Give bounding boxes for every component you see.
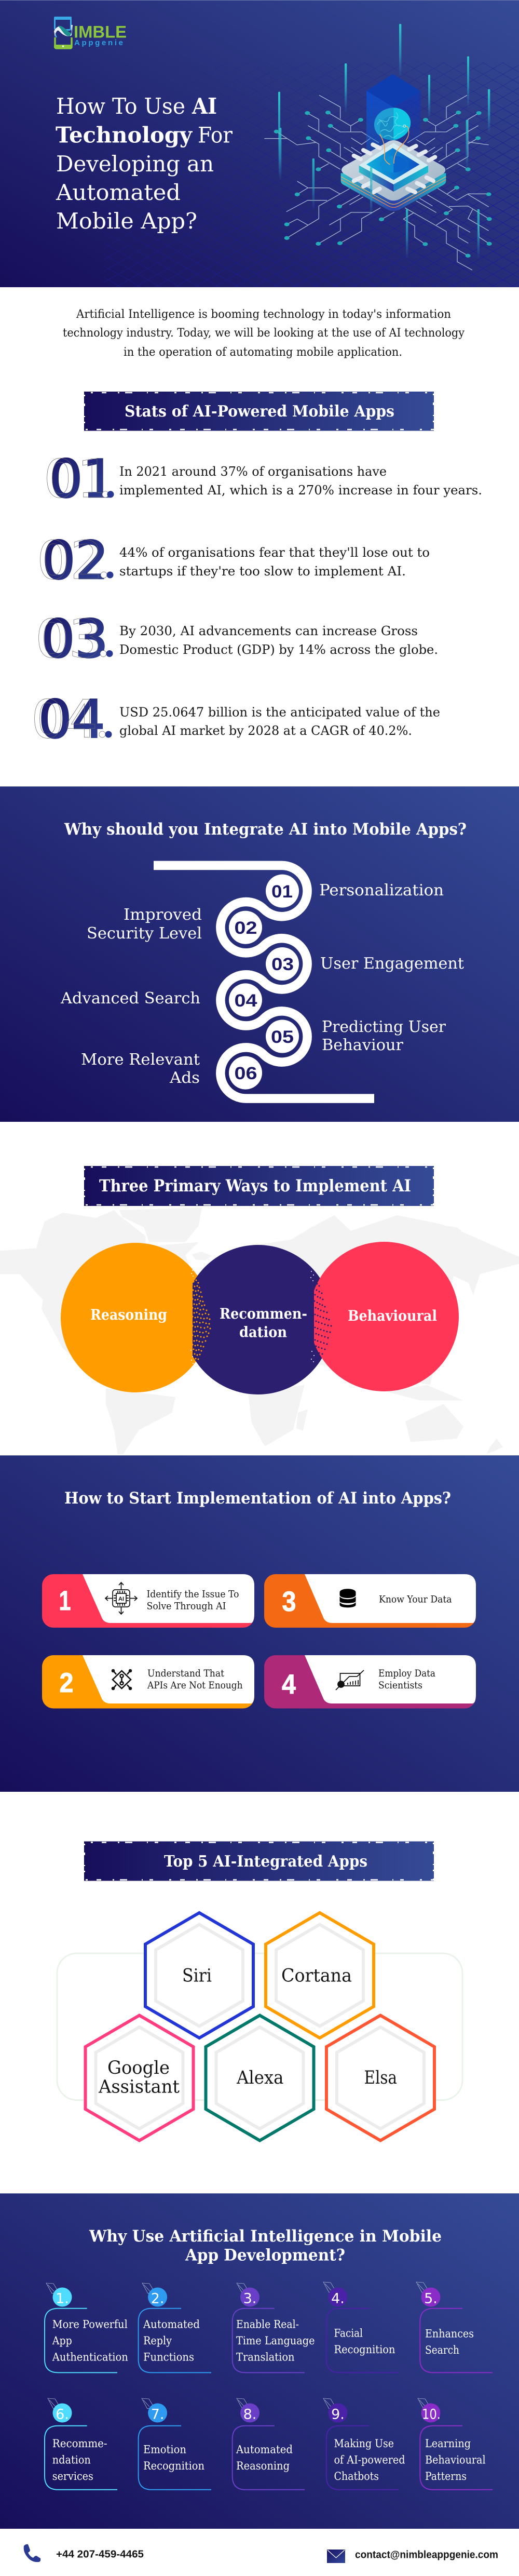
hexagon: Alexa: [206, 2015, 313, 2141]
reason 8: Automated: [236, 2443, 293, 2456]
hexagon: Alexa: Alexa: [236, 2068, 283, 2088]
title: AI: [192, 93, 217, 119]
stat 03: [35, 608, 438, 669]
card 1: 1: [59, 1586, 71, 1616]
card 1: Solve Through AI: [146, 1601, 226, 1612]
labels: Improved: [124, 906, 202, 924]
reason 1: 1.: [56, 2291, 69, 2307]
hexagon: Elsa: [326, 2015, 434, 2141]
number 04: 04: [38, 689, 105, 750]
reason 7: 7.: [151, 2407, 164, 2423]
stat 02: [37, 530, 430, 591]
labels: More Relevant: [81, 1051, 200, 1069]
labels: User Engagement: [320, 955, 464, 973]
card 4: Employ Data: [378, 1668, 435, 1679]
heading: stats banner: Stats of AI-Powered Mobile Apps: [125, 403, 394, 421]
circle labels: dation: [239, 1323, 287, 1341]
orange blend: [183, 1270, 211, 1364]
reason 1: [45, 2283, 128, 2372]
hexagon: Cortana: Cortana: [281, 1966, 352, 1987]
title: Automated: [56, 180, 181, 205]
stat 01: [44, 448, 482, 509]
heading: Why Use Artificial Intelligence in Mobile: [89, 2227, 442, 2246]
stat 04: [31, 689, 440, 750]
reason 6: 6.: [56, 2407, 69, 2423]
logo: IMBLE: [74, 23, 127, 42]
number 04: 04: [31, 689, 98, 750]
reason 7: Emotion: [143, 2443, 186, 2456]
circle labels: Behavioural: [348, 1307, 437, 1324]
circle labels: [90, 1305, 437, 1341]
card 1: Identify the Issue To: [146, 1589, 239, 1600]
numbered circles: 01: [271, 882, 293, 902]
hexagon: Siri: [145, 1913, 253, 2038]
labels: Ads: [169, 1069, 200, 1087]
card 2: APIs Are Not Enough: [147, 1680, 243, 1691]
labels: Behaviour: [322, 1036, 404, 1054]
heading banner: [84, 1842, 434, 1881]
heading banner: [84, 1166, 434, 1206]
title: Mobile App?: [56, 208, 197, 234]
reason 2: [139, 2283, 211, 2372]
logo: [54, 17, 127, 48]
icon: mail: [327, 2550, 345, 2563]
title: [56, 93, 233, 234]
panel: three primary ways: [0, 1166, 519, 1454]
email: contact@nimbleappgenie.com: [355, 2550, 498, 2561]
reason 2: Automated: [143, 2318, 200, 2331]
labels: Advanced Search: [60, 989, 200, 1008]
stat 01: In 2021 around 37% of organisations have: [119, 464, 387, 479]
reason 2: 2.: [151, 2291, 164, 2307]
labels: Predicting User: [322, 1018, 446, 1036]
reason 3: 3.: [243, 2291, 256, 2307]
circle: recommendation: [183, 1245, 333, 1394]
numbered circles: 04: [235, 991, 257, 1011]
number 01: 01: [49, 448, 116, 509]
reason 3: Enable Real-: [236, 2318, 299, 2331]
card 3: 3: [282, 1586, 296, 1617]
reason 10: Behavioural: [425, 2453, 486, 2466]
card 3: Know Your Data: [379, 1594, 452, 1605]
heading: stats banner: [84, 392, 434, 431]
reason 9: 9.: [331, 2407, 345, 2423]
reason 5: [416, 2282, 493, 2372]
number 03: 03: [42, 608, 108, 669]
reason 10: Learning: [425, 2437, 471, 2450]
logo: Appgenie: [74, 38, 123, 47]
numbered circles: 05: [271, 1027, 294, 1047]
reason 2: Functions: [143, 2351, 194, 2364]
icon: API: [112, 1670, 131, 1689]
intro text: technology industry. Today, we will be looking at the use of AI technology: [63, 327, 465, 340]
reason 9: [323, 2398, 405, 2490]
reason 3: Time Language: [236, 2334, 315, 2347]
reason 10: [418, 2398, 493, 2490]
reason 6: Recomme-: [52, 2437, 107, 2450]
reason 1: More Powerful: [52, 2318, 128, 2331]
hexagon: Siri: Siri: [182, 1966, 212, 1987]
number 02: 02: [42, 530, 109, 591]
stat 03: By 2030, AI advancements can increase Gross: [119, 623, 418, 638]
stat 02: 44% of organisations fear that they'll lose out to: [119, 545, 430, 560]
intro text: in the operation of automating mobile application.: [124, 346, 402, 359]
icon: phone: [24, 2544, 40, 2562]
stat 01: implemented AI, which is a 270% increase in four years.: [119, 482, 482, 498]
hexagon: Google Assistant: Google: [107, 2058, 170, 2078]
icon: database: [339, 1589, 356, 1607]
labels: Personalization: [319, 881, 444, 900]
reason 2: Reply: [143, 2334, 172, 2347]
stat 02: startups if they're too slow to implement AI.: [119, 564, 406, 579]
intro text: [63, 308, 465, 359]
stat 03: Domestic Product (GDP) by 14% across the globe.: [119, 642, 438, 657]
background frame: [57, 1953, 462, 2100]
panel: top 5 apps: [57, 1842, 462, 2141]
panel: how to start implementation: [0, 1455, 519, 1792]
title: How To Use: [56, 93, 185, 119]
stat 04: global AI market by 2028 at a CAGR of 40.2%.: [119, 723, 412, 738]
card 4: Scientists: [378, 1680, 422, 1691]
reason 10: 10.: [422, 2407, 441, 2423]
heading banner: Three Primary Ways to Implement AI: [99, 1176, 411, 1196]
card 2: Understand That: [147, 1668, 224, 1679]
number 01: 01: [44, 448, 111, 509]
reason 10: Patterns: [425, 2470, 467, 2483]
reason 1: Authentication: [52, 2351, 128, 2364]
numbered circles: 02: [235, 918, 257, 938]
reason 8: 8.: [243, 2407, 256, 2423]
footer contact: [24, 2544, 498, 2563]
numbered circles: 06: [235, 1064, 257, 1083]
circle: reasoning: [61, 1243, 210, 1392]
numbered circles: 03: [271, 955, 294, 974]
icon: AI chip: [105, 1582, 137, 1614]
reason 1: App: [52, 2334, 72, 2347]
circle labels: Reasoning: [90, 1306, 167, 1323]
circle: behavioural: [309, 1242, 459, 1391]
reason 7: [139, 2398, 211, 2490]
reason 8: [233, 2398, 305, 2490]
title: For: [198, 123, 233, 147]
labels: Security Level: [87, 924, 202, 943]
reason 9: Chatbots: [334, 2470, 379, 2483]
illustration: AI chip with brain and circuit: [264, 24, 492, 270]
panel: why use AI: [0, 2193, 519, 2529]
reason 5: 5.: [424, 2291, 438, 2307]
world map background: [0, 1208, 519, 1454]
icon: data chart: [336, 1670, 364, 1690]
card 1: [42, 1574, 254, 1628]
reason 7: Recognition: [143, 2460, 204, 2472]
title: Developing an: [56, 151, 214, 177]
reason 6: services: [52, 2470, 93, 2483]
reason 5: Enhances: [425, 2328, 474, 2340]
card 3: [264, 1574, 476, 1628]
card 4: 4: [282, 1669, 296, 1700]
heading: How to Start Implementation of AI into Apps?: [64, 1489, 451, 1508]
heading: App Development?: [185, 2246, 345, 2265]
reason 3: Translation: [236, 2351, 295, 2364]
reason 6: [45, 2398, 117, 2490]
heading: [89, 2227, 442, 2265]
reason 4: 4.: [331, 2291, 345, 2307]
navy blend: [306, 1271, 331, 1363]
card 4: [264, 1655, 476, 1709]
reason 4: [323, 2282, 399, 2372]
number 03: 03: [35, 608, 102, 669]
circle labels: Recommen-: [220, 1305, 307, 1322]
intro text: Artificial Intelligence is booming technology in today's information: [76, 308, 451, 321]
reason 4: Recognition: [334, 2343, 395, 2356]
reason 8: Reasoning: [236, 2460, 290, 2472]
reason 5: Search: [425, 2344, 459, 2356]
reason 6: ndation: [52, 2453, 91, 2466]
hexagon: Google Assistant: Assistant: [98, 2077, 180, 2098]
numbered circles: [229, 875, 299, 1090]
reason 9: Making Use: [334, 2437, 394, 2450]
serpentine track: [154, 865, 374, 1098]
icon: AI chip: AI: [118, 1596, 124, 1602]
labels: [60, 881, 464, 1087]
reason 3: [233, 2283, 315, 2372]
reason 9: of AI-powered: [334, 2453, 405, 2466]
panel: hero: [0, 0, 519, 287]
number 02: 02: [37, 530, 104, 591]
heading: Why should you Integrate AI into Mobile Apps?: [64, 820, 467, 839]
stat 04: USD 25.0647 billion is the anticipated value of the: [119, 704, 440, 720]
hexagon: Cortana: [266, 1913, 374, 2038]
card 2: [42, 1655, 254, 1709]
hexagon: Google Assistant: [85, 2015, 193, 2141]
panel: why integrate AI: [0, 786, 519, 1122]
card 2: 2: [59, 1668, 74, 1698]
title: Technology: [56, 123, 193, 147]
reason 4: Facial: [334, 2327, 363, 2340]
phone number: +44 207-459-4465: [56, 2549, 144, 2560]
heading banner: Top 5 AI-Integrated Apps: [164, 1853, 367, 1871]
hexagon: Elsa: Elsa: [364, 2068, 397, 2088]
